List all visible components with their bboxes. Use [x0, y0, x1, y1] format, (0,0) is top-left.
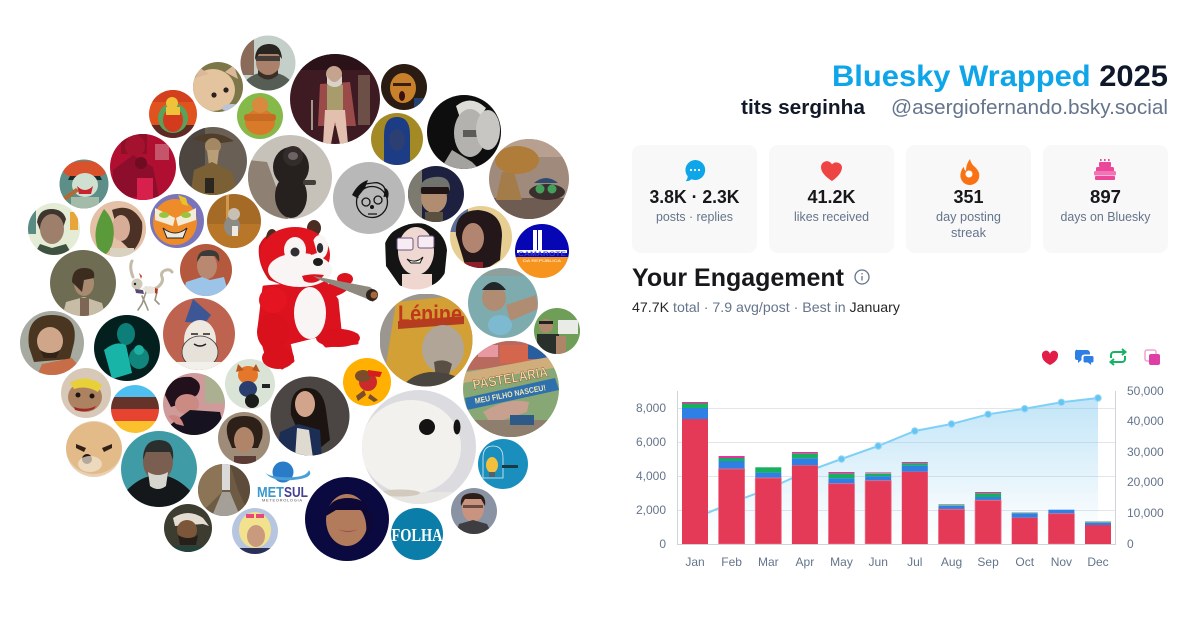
avatar: buddha — [149, 90, 197, 138]
avatar: George Costanza — [451, 488, 497, 536]
right axis labels — [1127, 384, 1164, 551]
avatar: black and white nun — [427, 95, 501, 172]
avatar: Folha logo: FOLHA — [392, 525, 442, 545]
avatar: caravaggio medusa — [381, 64, 427, 110]
month labels: Jul — [907, 555, 922, 569]
avatar: man at brick wall — [180, 244, 232, 300]
avatar: comic man — [28, 203, 80, 258]
chart: monthly engagement with cumulative line — [636, 384, 1164, 569]
avatar: red plush mascot with cigar — [257, 220, 378, 369]
bar: Nov — [1048, 510, 1074, 544]
avatar: angry pomeranian — [66, 421, 122, 477]
cumulative area — [695, 398, 1098, 544]
bar: Oct — [1012, 512, 1038, 544]
axis lines — [678, 391, 1116, 544]
avatar: old painting man with hat — [179, 127, 247, 198]
avatar: cat on sofa — [207, 194, 261, 248]
mouth — [302, 274, 324, 283]
bar: Dec — [1085, 521, 1111, 544]
right axis labels: 40,000 — [1127, 414, 1164, 428]
avatar: camarote da republica logo — [515, 224, 569, 279]
month labels: Nov — [1051, 555, 1072, 569]
avatar: diddy kong — [343, 358, 391, 406]
stat card: posts and replies: 3.8K · 2.3K — [650, 187, 740, 207]
stat card: day posting streak — [906, 145, 1031, 253]
bar: Sep — [975, 492, 1001, 544]
tail behind head — [259, 235, 285, 286]
month labels: Aug — [941, 555, 962, 569]
title: Bluesky Wrapped 2025 — [832, 60, 1168, 93]
eyes and nose — [290, 248, 300, 256]
left axis labels — [636, 401, 666, 551]
engagement summary: 47.7K total · 7.9 avg/post · Best in January — [632, 299, 900, 315]
stat card: likes received — [769, 145, 894, 253]
avatar: curly haired woman — [163, 373, 226, 436]
left axis labels: 4,000 — [636, 469, 666, 483]
right axis labels: 20,000 — [1127, 475, 1164, 489]
month labels: Jan — [685, 555, 705, 569]
avatar: woman with leaf — [90, 201, 146, 258]
right axis labels: 50,000 — [1127, 384, 1164, 398]
avatar: white fluffy creature — [361, 390, 476, 504]
avatar: small black monkey — [248, 135, 332, 219]
avatar: person in pool — [468, 268, 538, 338]
bar: Aug — [938, 504, 964, 544]
chart legend icons — [1042, 349, 1160, 365]
avatar: wizard engraving — [163, 298, 235, 370]
avatar: blue Mary on gold — [371, 113, 423, 170]
month labels: Mar — [758, 555, 779, 569]
cumulative line — [695, 398, 1098, 518]
avatar: teal hologram woman with cat — [94, 315, 160, 381]
avatar: pastelaria street sign — [463, 341, 559, 438]
icon: heart — [821, 161, 842, 181]
legend: likes — [1042, 351, 1058, 365]
avatar: smiling woman in blazer — [270, 376, 350, 460]
avatar: metsul logo — [257, 462, 310, 502]
heading: your engagement: Your Engagement — [632, 264, 845, 292]
avatar: man selfie in green — [534, 308, 580, 354]
legend: quotes — [1145, 350, 1160, 365]
stat card: posts and replies — [632, 145, 757, 253]
stat card: days on Bluesky: 897 — [1090, 187, 1121, 207]
ears — [266, 229, 278, 249]
handle: @asergiofernando.bsky.social — [891, 97, 1168, 119]
avatar: old man in red suit — [290, 54, 380, 144]
avatar: crash bandicoot plush — [225, 359, 275, 409]
avatar: Lenin book cover — [380, 294, 474, 390]
avatar: red poster man — [110, 132, 176, 202]
avatar: woman in dark blue — [305, 477, 389, 561]
avatar: metsul logo: SUL — [284, 484, 308, 501]
legend: replies — [1075, 350, 1094, 365]
stat card: days on Bluesky: days on Bluesky — [1060, 210, 1151, 224]
avatar: stripes flag — [111, 385, 159, 433]
avatar: man with glasses — [240, 36, 296, 90]
legend: reposts — [1110, 349, 1126, 365]
right axis labels: 10,000 — [1127, 506, 1164, 520]
month labels: Jun — [869, 555, 888, 569]
month labels: Dec — [1087, 555, 1109, 569]
avatar: painted youth — [218, 412, 270, 464]
avatar: skeletal creature without background — [131, 261, 172, 310]
avatar: Lenin book cover: Lénine — [398, 301, 462, 328]
avatar: joker mushroom — [59, 159, 109, 211]
month labels: Apr — [796, 555, 814, 569]
avatar: orangutan on grass — [237, 93, 283, 139]
month labels: Sep — [977, 555, 999, 569]
avatar: dark haired woman — [450, 206, 512, 268]
icon: speech bubble — [685, 160, 705, 181]
stacked bars — [682, 402, 1111, 544]
avatar: orson welles on teal — [121, 431, 197, 508]
gridlines — [677, 408, 1115, 510]
body silhouette — [259, 282, 357, 368]
stat card: posts and replies: posts · replies — [656, 210, 733, 224]
bar: Jun — [865, 472, 891, 544]
left axis labels: 6,000 — [636, 435, 666, 449]
stat card: day posting streak: 351 — [954, 187, 984, 207]
stat card: days on Bluesky — [1043, 145, 1168, 253]
left axis labels: 8,000 — [636, 401, 666, 415]
avatar: portrait with long hair — [20, 311, 84, 378]
stat card: day posting streak: streak — [951, 226, 987, 240]
head — [260, 227, 330, 283]
avatar: santa painting — [164, 504, 212, 554]
month labels: Oct — [1015, 555, 1035, 569]
month labels: Feb — [721, 555, 742, 569]
bar: Mar — [755, 467, 781, 544]
bar: May — [828, 472, 854, 544]
avatar: man with sunglasses — [408, 166, 464, 222]
stat card: day posting streak: day posting — [936, 210, 1001, 224]
avatar: Folha logo — [391, 508, 443, 560]
bar: Jul — [902, 462, 928, 544]
avatar: blonde drag portrait — [232, 508, 278, 554]
left axis labels: 2,000 — [636, 503, 666, 517]
month labels: May — [830, 555, 853, 569]
stat card: likes received: likes received — [794, 210, 869, 224]
avatar: pastelaria street sign: MEU FILHO NASCEU! — [474, 383, 546, 406]
cumulative markers — [838, 395, 1101, 462]
right axis labels: 0 — [1127, 537, 1134, 551]
avatar: cartoon woman — [385, 223, 447, 290]
avatar: kitten with yellow headband — [61, 368, 111, 418]
avatar: narrow alley — [198, 464, 250, 516]
avatar: camarote da republica logo: CAMAROTE — [518, 252, 566, 258]
belly — [294, 287, 326, 339]
avatar: metsul logo: METEOROLOGIA — [262, 498, 302, 502]
right axis labels: 30,000 — [1127, 445, 1164, 459]
avatar: blue light bulb in cage — [478, 439, 528, 489]
avatar: orange cartoon with glasses — [150, 194, 204, 248]
month labels — [685, 555, 1109, 569]
icon: cake — [1094, 159, 1116, 180]
far arm — [318, 277, 352, 301]
bar: Feb — [719, 456, 745, 544]
stat card: likes received: 41.2K — [808, 187, 856, 207]
avatar: curly sketch on gray — [333, 162, 405, 234]
avatar: pastelaria street sign: PASTELARIA — [471, 364, 549, 392]
avatar: metsul logo: MET — [257, 484, 284, 501]
display name: tits serginha — [741, 97, 866, 119]
avatar: man outdoors in profile — [50, 250, 116, 318]
avatar: camarote da republica logo: DA REPÚBLICA — [523, 258, 561, 263]
avatar bubble cluster — [20, 35, 580, 561]
bar: Jan — [682, 402, 708, 544]
bar: Apr — [792, 452, 818, 544]
left axis labels: 0 — [659, 537, 666, 551]
icon: info — [855, 270, 869, 284]
avatar: kitten — [191, 62, 243, 112]
cigar — [313, 276, 378, 302]
avatar: mushroom cloud with creature — [489, 139, 569, 219]
icon: flame — [960, 159, 979, 185]
